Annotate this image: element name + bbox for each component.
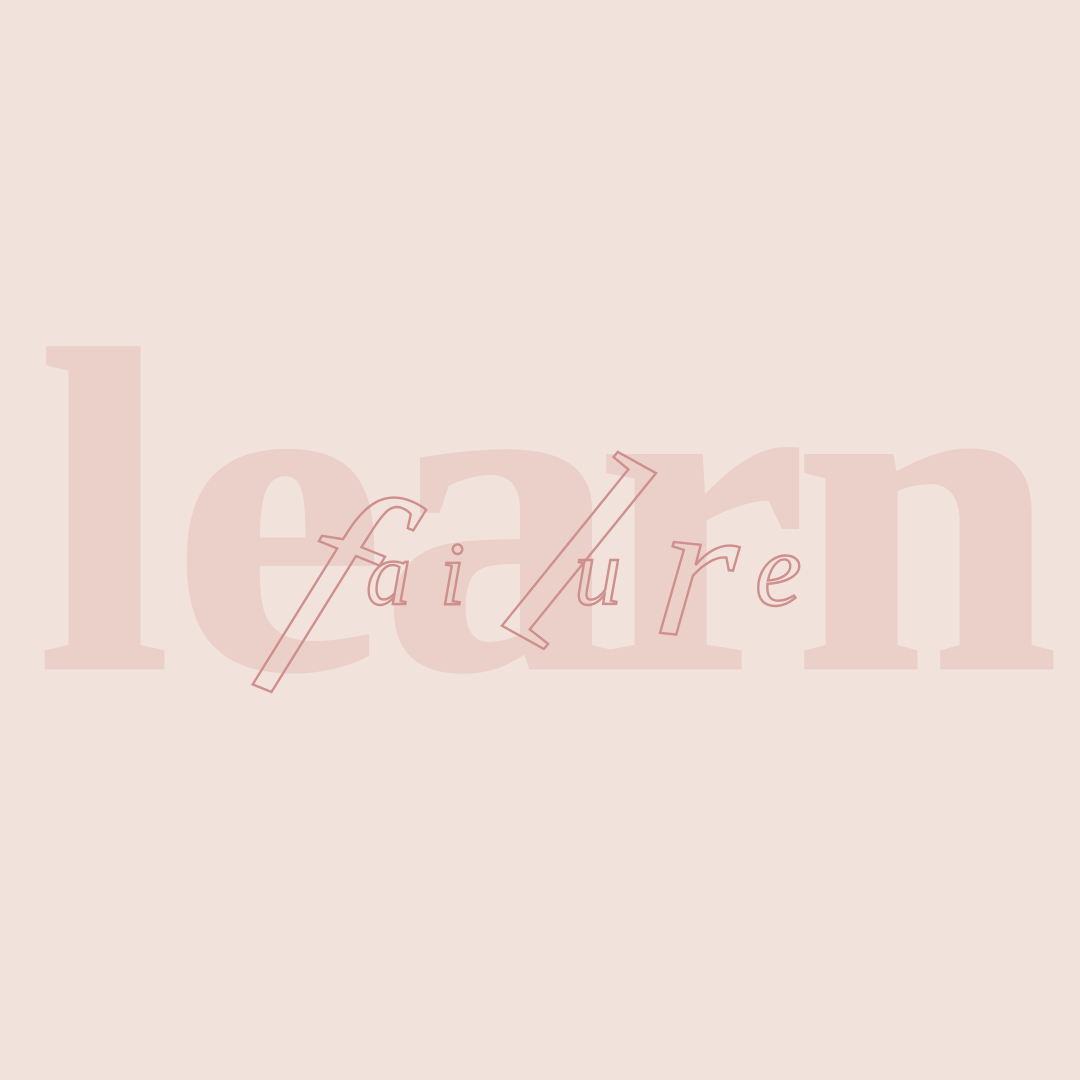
script word: failure: f [249, 428, 445, 722]
script word: failure: r [647, 456, 749, 684]
background word: learn: learn [38, 259, 1058, 767]
script word: failure: a [366, 525, 411, 624]
script word: failure: u [574, 519, 622, 625]
script word: failure: e [755, 511, 802, 628]
script word: failure: l [456, 384, 690, 715]
script word: failure: i [440, 525, 465, 624]
